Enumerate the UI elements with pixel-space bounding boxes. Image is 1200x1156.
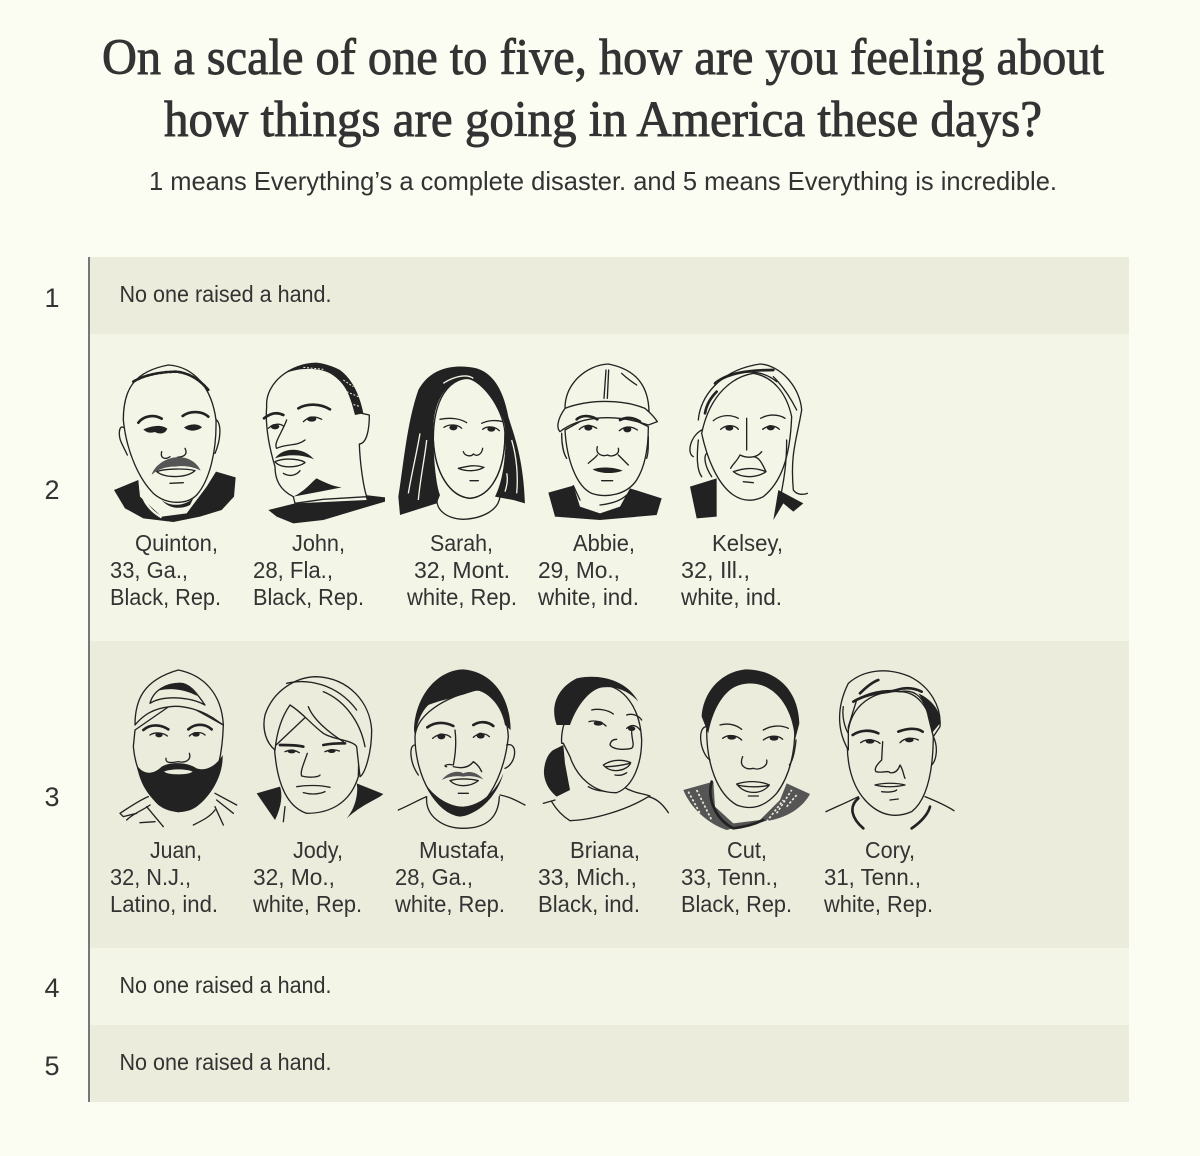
- caption: row 2 people: white, ind.: [537, 584, 639, 610]
- caption: row 2 people: Sarah,: [430, 530, 493, 556]
- caption: row 2 people: Abbie,: [573, 530, 635, 556]
- caption: row 2 people: Kelsey,: [712, 530, 783, 556]
- caption: row 3 people: Briana,: [570, 837, 640, 863]
- portrait: John: [264, 363, 385, 523]
- caption: row 3 people: [110, 837, 933, 917]
- portrait: Abbie: [548, 364, 662, 520]
- caption: row 3 people: white, Rep.: [252, 891, 362, 917]
- portrait: Juan: [120, 670, 237, 827]
- panel: rating 5 band: [90, 1025, 1129, 1102]
- portrait: Mustafa: [398, 669, 525, 828]
- caption: row 2 people: [110, 530, 783, 610]
- caption: row 2 people: 29, Mo.,: [538, 557, 620, 583]
- caption: row 3 people: 32, N.J.,: [110, 864, 191, 890]
- scale number 5: 5: [44, 1051, 60, 1081]
- title: how things are going in America these days?: [164, 92, 1042, 148]
- text: rating 1 no hands: No one raised a hand.: [120, 281, 332, 307]
- caption: row 3 people: Jody,: [293, 837, 343, 863]
- panel: rating 2 band: [90, 334, 1129, 641]
- caption: row 3 people: Black, Rep.: [681, 891, 792, 917]
- scale number 4: 4: [44, 973, 60, 1003]
- scale number 3: 3: [44, 782, 60, 812]
- caption: row 3 people: Mustafa,: [419, 837, 505, 863]
- title: On a scale of one to five, how are you feeling about: [102, 30, 1104, 86]
- caption: row 3 people: 28, Ga.,: [395, 864, 473, 890]
- text: rating 5 no hands: No one raised a hand.: [120, 1049, 332, 1075]
- scale number 1: 1: [44, 283, 60, 313]
- panel: rating 4 band: [90, 948, 1129, 1025]
- caption: row 3 people: Latino, ind.: [110, 891, 218, 917]
- caption: row 3 people: Cut,: [727, 837, 767, 863]
- portrait: Jody: [257, 677, 383, 822]
- caption: row 3 people: Cory,: [865, 837, 915, 863]
- caption: row 2 people: John,: [292, 530, 345, 556]
- title: [102, 30, 1104, 148]
- caption: row 3 people: 33, Tenn.,: [681, 864, 778, 890]
- caption: row 3 people: Juan,: [150, 837, 202, 863]
- caption: row 2 people: 28, Fla.,: [253, 557, 333, 583]
- caption: row 2 people: Black, Rep.: [110, 584, 221, 610]
- portrait: Briana: [543, 677, 668, 821]
- caption: row 3 people: white, Rep.: [823, 891, 933, 917]
- portrait: Kelsey: [690, 364, 807, 520]
- caption: row 2 people: white, ind.: [680, 584, 782, 610]
- panel: rating 1 band: [90, 257, 1129, 334]
- text: rating 4 no hands: No one raised a hand.: [120, 972, 332, 998]
- panel: rating 3 band: [90, 641, 1129, 948]
- caption: row 2 people: Black, Rep.: [253, 584, 364, 610]
- caption: row 2 people: 32, Mont.: [414, 557, 510, 583]
- caption: row 3 people: Black, ind.: [538, 891, 640, 917]
- portrait: Cory: [826, 671, 954, 828]
- caption: row 3 people: 33, Mich.,: [538, 864, 637, 890]
- portrait: Cut: [683, 669, 810, 830]
- caption: row 2 people: Quinton,: [135, 530, 218, 556]
- subtitle: 1 means Everything’s a complete disaster. and 5 means Everything is incredible.: [149, 166, 1057, 196]
- caption: row 2 people: white, Rep.: [406, 584, 517, 610]
- vertical axis line: [88, 257, 90, 1102]
- caption: row 2 people: 32, Ill.,: [681, 557, 750, 583]
- scale number 2: 2: [44, 475, 60, 505]
- caption: row 3 people: white, Rep.: [394, 891, 505, 917]
- caption: row 2 people: 33, Ga.,: [110, 557, 188, 583]
- portrait: Sarah: [398, 367, 525, 519]
- caption: row 3 people: 31, Tenn.,: [824, 864, 921, 890]
- caption: row 3 people: 32, Mo.,: [253, 864, 335, 890]
- portrait: Quinton: [114, 365, 236, 522]
